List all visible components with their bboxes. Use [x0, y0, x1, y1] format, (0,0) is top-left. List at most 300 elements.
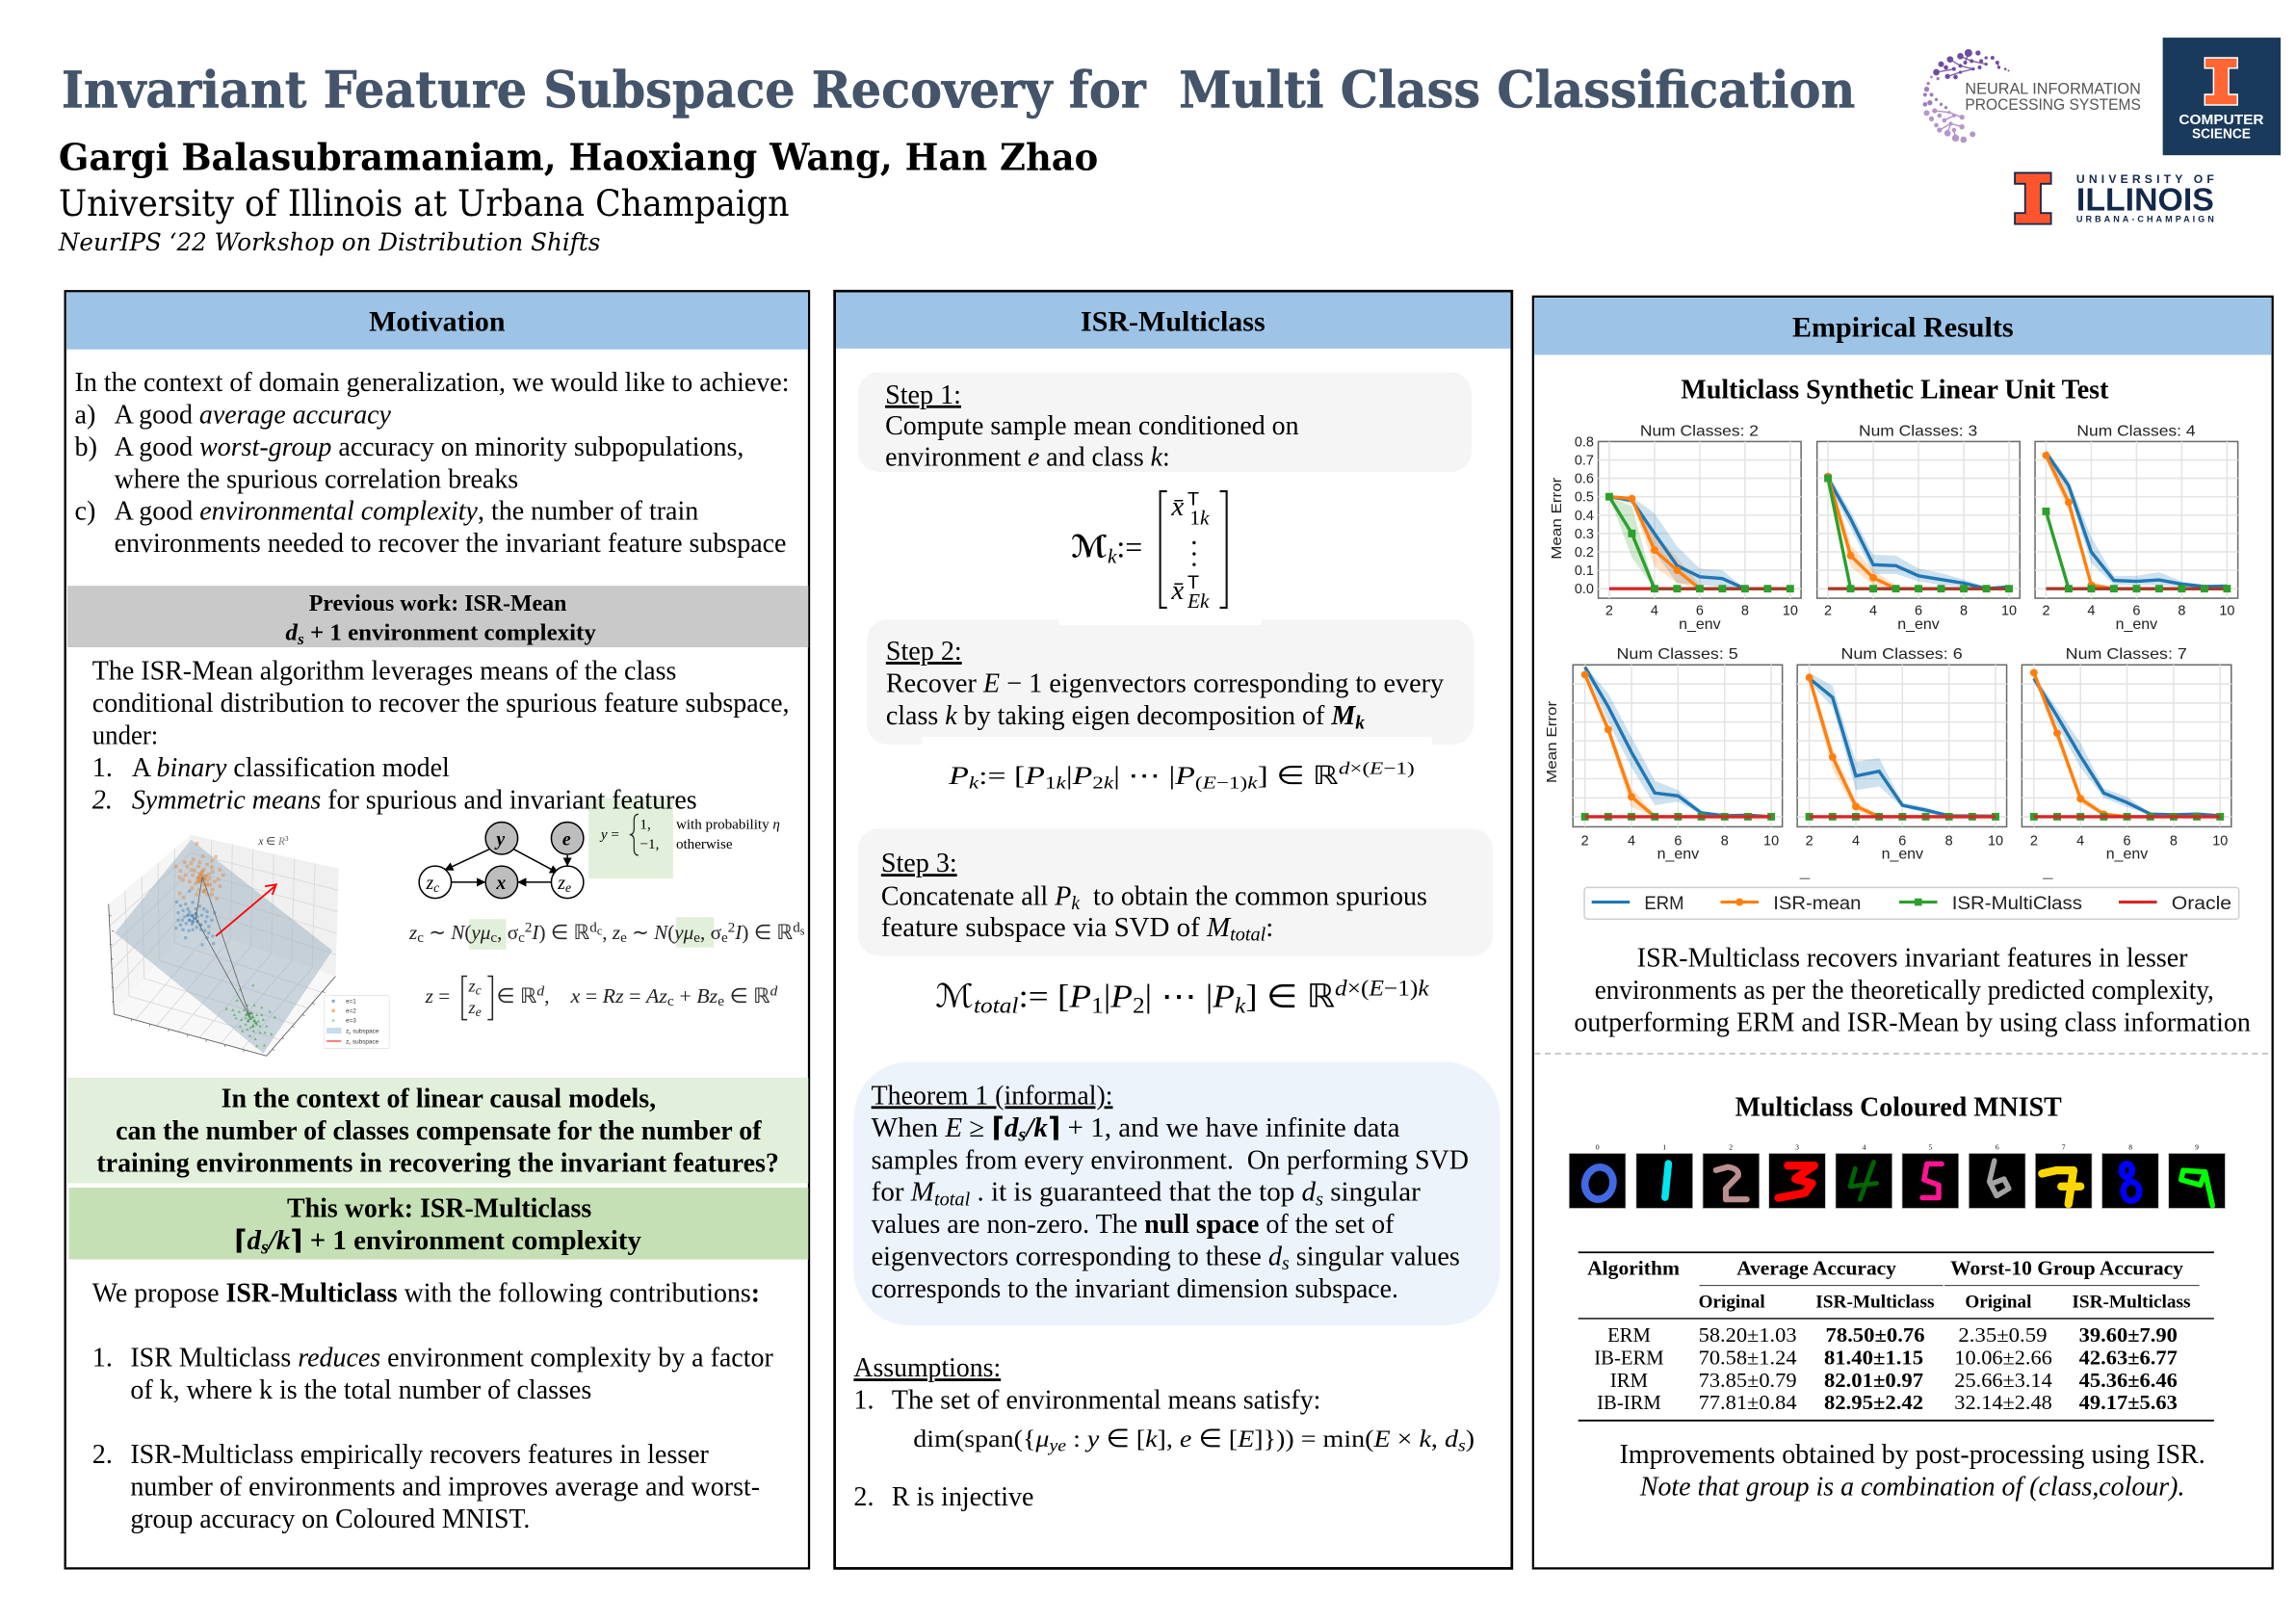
chart: num classes 2: 4	[1651, 604, 1658, 619]
text block: assumptions: dim(span({ μ	[913, 1425, 1048, 1452]
callout: label definition: with probability η	[676, 817, 780, 833]
equation: class mean matrix: k	[1108, 544, 1117, 567]
step 3: k	[1071, 893, 1081, 914]
chart legend: ISR-mean	[1773, 894, 1861, 914]
text block: assumptions: 1.	[853, 1386, 874, 1416]
text block: goals: environments needed to recover the invariant feature subspace	[115, 529, 786, 559]
chart: num classes 2: 0.1	[1575, 563, 1594, 579]
chart: num classes 5: 6	[1674, 833, 1682, 849]
text block: MNIST conclusion	[1620, 1440, 2205, 1502]
text block: ISR-Mean: 1.	[92, 753, 113, 783]
equation: per-class subspace: d×( E −1)	[1339, 759, 1408, 778]
equation: latent to observed: ,	[544, 984, 571, 1007]
text block: MNIST conclusion: Improvements obtained by post-processing using ISR.	[1620, 1440, 2205, 1470]
text block: goals: In the context of domain generalization, we would like to achieve:	[75, 368, 790, 398]
callout: research question: training environments in recovering the invariant features?	[96, 1148, 779, 1178]
panel: ISR-Multiclass	[835, 291, 1512, 1568]
equation: per-class subspace: (E −1) k	[1195, 773, 1255, 793]
text block: contributions: ISR Multiclass reduces environment complexity by a factor	[130, 1344, 773, 1373]
chart: 3D subspace plot: x ∈ R	[258, 836, 285, 848]
equation: latent distributions: N(yμ	[451, 921, 491, 944]
callout: this work: ⌈d	[234, 1226, 261, 1256]
text block: goals: A good average accuracy	[115, 400, 391, 430]
chart: num classes 2: 2	[1605, 604, 1613, 619]
equation: total subspace: |	[1104, 979, 1110, 1014]
table: accuracy results: 45.36±6.46	[2079, 1371, 2178, 1392]
digit samples: 5	[1928, 1143, 1932, 1152]
equation: latent to observed: e	[718, 993, 724, 1009]
step 1	[858, 373, 1472, 472]
equation: total subspace: := [	[1018, 979, 1069, 1014]
step 3: to obtain the common spurious	[1080, 881, 1427, 911]
equation: latent to observed: +	[674, 984, 696, 1007]
text block: contributions: number of environments and improves average and worst-	[130, 1472, 760, 1502]
chart: num classes 2: 0.3	[1575, 527, 1594, 542]
equation: latent to observed	[425, 976, 778, 1020]
heading: motivation: Motivation	[369, 307, 506, 338]
table: accuracy results: 25.66±3.14	[1954, 1371, 2052, 1392]
table: accuracy results: ISR-Multiclass	[1815, 1293, 1934, 1313]
heading: coloured MNIST: Multiclass Coloured MNIST	[1735, 1093, 2062, 1123]
affiliation: University of Illinois at Urbana Champaign	[59, 182, 790, 224]
chart: num classes 3: 10	[2001, 604, 2017, 619]
table: accuracy results: IRM	[1610, 1371, 1648, 1392]
chart: num classes 6: 8	[1945, 833, 1953, 849]
callout: previous work: d	[285, 619, 299, 645]
equation: total subspace: d×(E−1)k	[1335, 976, 1427, 1000]
callout: this work: ⌉ + 1 environment complexity	[290, 1226, 632, 1256]
chart: num classes 5: Num Classes: 5	[1617, 646, 1738, 663]
equation: latent distributions: s	[800, 925, 805, 938]
step 3: Concatenate all P	[881, 881, 1071, 911]
chart: 3D subspace plot: subspace	[351, 1038, 379, 1045]
equation: latent to observed: e	[476, 1005, 482, 1019]
text block: assumptions: The set of environmental means satisfy:	[892, 1386, 1320, 1416]
text block: ISR-Mean: Symmetric means for spurious and invariant features	[132, 785, 697, 815]
chart: num classes 7: 10	[2212, 833, 2228, 849]
table: accuracy results: 78.50±0.76	[1825, 1325, 1925, 1347]
equation: class mean matrix: :=	[1116, 530, 1142, 563]
equation: class mean matrix: ℳ	[1071, 530, 1108, 563]
chart: num classes 4: Num Classes: 4	[2076, 423, 2196, 439]
table: accuracy results: IB-IRM	[1597, 1393, 1661, 1414]
equation: latent to observed: c	[667, 993, 674, 1009]
chart: num classes 2: 0.0	[1575, 582, 1594, 597]
equation: latent distributions: , σ	[700, 921, 722, 944]
chart: num classes 5: Mean Error	[1545, 701, 1560, 783]
digit samples: 3	[1795, 1143, 1799, 1152]
text block: contributions: 1.	[92, 1344, 113, 1373]
theorem: total	[934, 1189, 971, 1210]
text block: assumptions: s	[1458, 1436, 1466, 1455]
chart: num classes 2: 10	[1783, 604, 1798, 619]
table: accuracy results: Algorithm	[1587, 1259, 1680, 1280]
chart: num classes 7: 8	[2170, 833, 2178, 849]
chart: num classes 7: Num Classes: 7	[2066, 646, 2187, 663]
equation: per-class subspace: |	[1066, 761, 1073, 790]
chart: num classes 3: 8	[1960, 604, 1968, 619]
callout: label definition	[588, 798, 780, 878]
heading: synthetic test: Multiclass Synthetic Linear Unit Test	[1681, 376, 2109, 406]
table: accuracy results: 81.40±1.15	[1824, 1347, 1923, 1369]
equation: total subspace: P	[1109, 979, 1133, 1014]
callout: research question: In the context of linear causal models,	[222, 1084, 656, 1113]
equation: latent distributions: e	[721, 929, 728, 946]
logo: NeurIPS: NEURAL INFORMATION	[1965, 79, 2141, 97]
chart: num classes 5: 4	[1628, 833, 1635, 849]
text block: assumptions: :	[1066, 1425, 1087, 1452]
table: accuracy results: 2.35±0.59	[1958, 1325, 2048, 1347]
text block: assumptions: Assumptions:	[853, 1353, 1001, 1383]
equation: latent distributions: N(yμ	[654, 921, 693, 944]
chart: num classes 7: 2	[2030, 833, 2038, 849]
chart: num classes 5: 2	[1581, 833, 1589, 849]
equation: latent distributions: z	[612, 921, 620, 944]
equation: class mean matrix	[1071, 489, 1227, 613]
chart: num classes 7: n_env	[2106, 846, 2148, 862]
chart: 3D subspace plot	[109, 834, 389, 1056]
chart: num classes 5: 8	[1721, 833, 1729, 849]
text block: goals: b)	[75, 432, 97, 462]
heading: empirical results	[1534, 298, 2272, 354]
equation: total subspace: ℳ	[935, 979, 974, 1014]
chart: num classes 7	[2022, 646, 2231, 862]
chart: num classes 2: 0.8	[1575, 434, 1594, 450]
chart: 3D subspace plot: z	[346, 1028, 349, 1034]
theorem: s	[1316, 1189, 1323, 1210]
callout: research question	[67, 1078, 808, 1183]
table: accuracy results: 82.01±0.97	[1824, 1371, 1923, 1392]
text block: goals: c)	[75, 497, 95, 527]
table: accuracy results: 82.95±2.42	[1824, 1393, 1923, 1414]
callout: this work	[68, 1188, 808, 1260]
chart: num classes 6	[1797, 646, 2007, 862]
table: accuracy results: 32.14±2.48	[1954, 1393, 2052, 1414]
digit samples: 0	[1596, 1143, 1600, 1152]
text block: contributions: ISR-Multiclass empirically recovers features in lesser	[130, 1440, 710, 1470]
diagram: causal graph	[419, 823, 584, 899]
equation: per-class subspace: := [	[978, 761, 1025, 790]
logo: NeurIPS	[1923, 49, 2141, 143]
equation: latent to observed: z	[469, 976, 476, 995]
text block: contributions: We propose ISR-Multiclass with the following contributions:	[92, 1279, 760, 1309]
equation: total subspace: 2	[1133, 994, 1145, 1018]
text block: assumptions: ye	[1047, 1436, 1066, 1455]
chart: num classes 6: Num Classes: 6	[1840, 646, 1963, 663]
step 3	[858, 828, 1493, 956]
text block: ISR-Mean: 2.	[92, 785, 113, 815]
theorem: d	[1302, 1178, 1317, 1208]
logo: University of Illinois: ILLINOIS	[2076, 182, 2214, 218]
digit samples: 1	[1662, 1143, 1666, 1152]
equation: per-class subspace: P	[1174, 761, 1195, 790]
step 1: Step 1:	[885, 380, 961, 410]
text block: assumptions: R is injective	[892, 1482, 1033, 1512]
table: accuracy results: 70.58±1.24	[1699, 1347, 1797, 1369]
text block: goals: A good worst-group accuracy on minority subpopulations,	[115, 432, 744, 462]
table: accuracy results: IB-ERM	[1594, 1347, 1664, 1369]
theorem: ⌉ + 1, and we have infinite data	[1048, 1113, 1389, 1143]
venue: NeurIPS ‘22 Workshop on Distribution Shifts	[58, 228, 600, 256]
equation: latent distributions: c	[518, 929, 525, 946]
chart: num classes 7: 6	[2124, 833, 2131, 849]
callout: previous work: + 1 environment complexity	[304, 619, 596, 645]
equation: latent distributions: z	[408, 921, 417, 944]
chart: num classes 2: 0.2	[1575, 545, 1594, 561]
heading: empirical results: Empirical Results	[1792, 313, 2014, 344]
text block: assumptions: 2.	[853, 1482, 874, 1512]
chart legend: ERM	[1644, 894, 1683, 914]
diagram: causal graph: z	[426, 873, 433, 894]
chart: num classes 3: 2	[1824, 604, 1832, 619]
table: accuracy results: 39.60±7.90	[2079, 1325, 2178, 1347]
step 1: Compute sample mean conditioned on	[885, 411, 1299, 441]
callout: research question: can the number of classes compensate for the number of	[116, 1116, 762, 1146]
logo: computer science: SCIENCE	[2192, 125, 2251, 142]
theorem: s	[1282, 1253, 1290, 1274]
text block: assumptions	[853, 1353, 1474, 1512]
text block: ISR-Mean: The ISR-Mean algorithm leverages means of the class	[92, 656, 676, 686]
equation: latent distributions: ∼	[627, 921, 654, 944]
equation: latent distributions: ) ∈ ℝ	[742, 921, 793, 944]
theorem: . it is guaranteed that the top	[970, 1178, 1302, 1208]
theorem: /k	[1024, 1113, 1048, 1143]
callout: previous work: s	[297, 630, 304, 648]
equation: latent distributions: d	[589, 920, 597, 936]
callout: label definition: −1,	[639, 836, 659, 852]
callout: previous work: Previous work: ISR-Mean	[309, 590, 567, 616]
heading: ISR-Multiclass	[836, 293, 1510, 349]
text block: ISR-Mean: under:	[92, 720, 158, 750]
table: accuracy results: 77.81±0.84	[1699, 1393, 1797, 1414]
theorem: samples from every environment. On performing SVD	[872, 1145, 1469, 1175]
chart: num classes 4	[2035, 423, 2238, 633]
digit samples: 6	[1996, 1143, 1999, 1152]
chart: num classes 4: 6	[2132, 604, 2140, 619]
panel: motivation	[65, 291, 809, 1568]
digit samples: 9	[2195, 1143, 2199, 1152]
text block: assumptions: y ∈ [k], e ∈ [E]})) = min( E × k, d	[1087, 1425, 1457, 1452]
equation: per-class subspace: 2k	[1092, 773, 1111, 793]
equation: latent to observed: d	[770, 982, 778, 999]
equation: class mean matrix: 1k	[1189, 506, 1210, 529]
equation: total subspace: P	[1212, 979, 1235, 1014]
table: accuracy results	[1578, 1252, 2214, 1421]
logo: University of Illinois	[2015, 172, 2214, 224]
equation: latent distributions: 2	[728, 920, 735, 936]
chart: num classes 2: 0.5	[1575, 490, 1594, 506]
text block: goals: A good environmental complexity, the number of train	[115, 497, 698, 527]
chart: num classes 6: 4	[1852, 833, 1860, 849]
equation: total subspace: ] ∈ ℝ	[1245, 979, 1335, 1014]
equation: latent distributions: 2	[525, 920, 532, 936]
table: accuracy results: Worst-10 Group Accuracy	[1950, 1259, 2184, 1280]
equation: total subspace: total	[974, 994, 1018, 1018]
theorem: Theorem 1 (informal):	[872, 1081, 1113, 1111]
equation: latent distributions: I	[734, 921, 743, 944]
diagram: causal graph: y	[494, 828, 505, 850]
chart: num classes 2: 8	[1741, 604, 1749, 619]
chart: num classes 2: 6	[1696, 604, 1704, 619]
equation: latent distributions: ) ∈ ℝ	[538, 921, 590, 944]
equation: latent to observed: c	[476, 982, 482, 997]
equation: total subspace: | ⋯ |	[1145, 979, 1213, 1014]
callout: this work: /k	[267, 1226, 290, 1256]
text block: goals: a)	[75, 400, 95, 430]
title: Invariant Feature Subspace Recovery for Multi Class Classification	[62, 62, 1855, 120]
chart: 3D subspace plot: c	[349, 1040, 351, 1045]
table: accuracy results: 58.20±1.03	[1699, 1325, 1797, 1347]
table: accuracy results: ISR-Multiclass	[2072, 1293, 2191, 1313]
table: accuracy results: Original	[1699, 1293, 1765, 1313]
diagram: causal graph: e	[565, 880, 571, 895]
equation: per-class subspace: P	[1024, 761, 1045, 790]
chart: num classes 4: 2	[2042, 604, 2049, 619]
theorem: s	[1017, 1124, 1027, 1145]
diagram: causal graph: e	[562, 828, 571, 850]
table: accuracy results: 10.06±2.66	[1954, 1347, 2052, 1369]
equation: per-class subspace: | ⋯ |	[1113, 761, 1175, 790]
step 2: class k by taking eigen decomposition of M	[886, 701, 1355, 731]
callout: label definition: 1,	[639, 817, 651, 833]
equation: class mean matrix: T	[1187, 572, 1199, 593]
equation: latent distributions: ∼	[424, 921, 451, 944]
chart: num classes 2: Mean Error	[1550, 477, 1565, 560]
equation: total subspace: k	[1235, 994, 1246, 1018]
equation: class mean matrix: Ek	[1187, 589, 1210, 613]
chart: num classes 2: 0.4	[1575, 509, 1594, 524]
theorem: corresponds to the invariant dimension subspace.	[872, 1274, 1398, 1304]
text block: ISR-Mean	[92, 656, 790, 815]
equation: latent distributions: c	[417, 929, 424, 946]
step 1: environment e and class k:	[885, 442, 1170, 472]
equation: latent to observed: x = Rz = Az	[571, 984, 666, 1007]
logo: computer science: COMPUTER	[2179, 112, 2264, 128]
text block: goals	[75, 368, 790, 559]
equation: total subspace: P	[1068, 979, 1091, 1014]
chart: num classes 2	[1550, 423, 1801, 633]
equation: per-class subspace: k	[969, 773, 979, 793]
logo: University of Illinois: UNIVERSITY OF	[2076, 172, 2214, 186]
equation: latent to observed: z	[469, 998, 476, 1017]
logo: University of Illinois: URBANA-CHAMPAIGN	[2076, 215, 2214, 224]
chart: 3D subspace plot: e=3	[346, 1018, 356, 1025]
chart legend: ISR-MultiClass	[1952, 894, 2082, 914]
equation: class mean matrix: x̄	[1170, 575, 1184, 606]
equation: latent distributions: , σ	[497, 921, 519, 944]
equation: latent distributions: ,	[602, 921, 613, 944]
step 2	[867, 619, 1474, 745]
equation: latent distributions: I	[531, 921, 539, 944]
equation: latent to observed: Bz	[696, 984, 718, 1007]
step 3: Step 3:	[881, 849, 957, 878]
text block: synthetic conclusion: outperforming ERM and ISR-Mean by using class information	[1574, 1007, 2251, 1037]
table: accuracy results: Original	[1965, 1293, 2031, 1313]
equation: latent to observed: d	[536, 982, 545, 999]
table: accuracy results: 49.17±5.63	[2079, 1393, 2178, 1414]
step 2: Recover E − 1 eigenvectors corresponding to every	[886, 668, 1444, 698]
text block: assumptions: )	[1466, 1425, 1474, 1452]
chart: num classes 3	[1817, 423, 2020, 633]
equation: latent to observed: ∈ ℝ	[496, 984, 535, 1007]
table: accuracy results: 42.63±6.77	[2079, 1347, 2178, 1369]
heading: motivation	[66, 292, 808, 350]
diagram: causal graph: z	[558, 873, 565, 894]
logo: NeurIPS: PROCESSING SYSTEMS	[1965, 95, 2141, 114]
chart: num classes 3: n_env	[1897, 616, 1940, 633]
heading: ISR-Multiclass: ISR-Multiclass	[1081, 307, 1265, 338]
digit samples	[1569, 1143, 2225, 1208]
text block: contributions: group accuracy on Coloured MNIST.	[130, 1504, 530, 1534]
callout: label definition: y =	[599, 826, 619, 843]
chart: num classes 3: 4	[1869, 604, 1877, 619]
chart: 3D subspace plot: e=1	[346, 999, 356, 1006]
text block: ISR-Mean: conditional distribution to recover the spurious feature subspace,	[92, 689, 790, 719]
callout: this work: s	[260, 1237, 269, 1258]
chart: num classes 3: 6	[1915, 604, 1922, 619]
theorem: singular	[1323, 1178, 1421, 1208]
equation: latent distributions: d	[793, 920, 800, 936]
theorem: When E ≥ ⌈d	[872, 1113, 1018, 1143]
chart: num classes 4: n_env	[2116, 616, 2157, 633]
equation: latent distributions	[408, 917, 805, 950]
callout: previous work	[67, 586, 808, 648]
equation: total subspace: 1	[1091, 994, 1104, 1018]
chart: num classes 5: n_env	[1657, 846, 1699, 862]
text block: synthetic conclusion: ISR-Multiclass recovers invariant features in lesser	[1637, 943, 2188, 973]
theorem	[853, 1061, 1500, 1325]
chart: num classes 4: 10	[2219, 604, 2234, 619]
theorem: singular values	[1290, 1243, 1460, 1272]
chart: num classes 3: Num Classes: 3	[1859, 423, 1977, 439]
theorem: values are non-zero. The null space of the set of	[872, 1210, 1395, 1240]
table: accuracy results: ERM	[1607, 1325, 1651, 1347]
text block: contributions: 2.	[92, 1440, 113, 1470]
digit samples: 2	[1729, 1143, 1733, 1152]
equation: class mean matrix: x̄	[1170, 491, 1184, 522]
chart legend: Oracle	[2172, 894, 2231, 914]
chart: 3D subspace plot: 3	[285, 834, 289, 843]
step 3: feature subspace via SVD of M	[881, 913, 1229, 943]
theorem: eigenvectors corresponding to these d	[872, 1243, 1282, 1272]
table: accuracy results: Average Accuracy	[1736, 1259, 1897, 1280]
text block: synthetic conclusion	[1574, 943, 2251, 1037]
callout: this work: This work: ISR-Multiclass	[287, 1193, 591, 1223]
step 3: total	[1230, 925, 1266, 946]
equation: latent distributions: e	[693, 929, 700, 946]
digit samples: 7	[2062, 1143, 2066, 1152]
chart: num classes 6: 2	[1806, 833, 1813, 849]
diagram: causal graph: x	[495, 873, 506, 894]
equation: latent to observed: ∈ ℝ	[724, 984, 770, 1007]
chart legend	[1584, 887, 2239, 919]
chart: num classes 2: n_env	[1679, 616, 1721, 633]
chart: num classes 2: Num Classes: 2	[1640, 423, 1759, 439]
chart: num classes 5	[1545, 646, 1783, 862]
equation: per-class subspace: P	[948, 761, 969, 790]
table: accuracy results: 73.85±0.79	[1699, 1371, 1797, 1392]
chart: num classes 6: n_env	[1882, 846, 1923, 862]
chart: 3D subspace plot: e	[349, 1030, 352, 1034]
chart: num classes 4: 4	[2087, 604, 2095, 619]
text block: synthetic conclusion: environments as per the theoretically predicted complexity,	[1595, 976, 2214, 1006]
callout: label definition: otherwise	[676, 836, 733, 852]
equation: per-class subspace: P	[1071, 761, 1092, 790]
text block: ISR-Mean: A binary classification model	[132, 753, 450, 783]
equation: per-class subspace: 1k	[1045, 773, 1064, 793]
equation: latent distributions: c	[597, 925, 603, 938]
text block: contributions	[92, 1279, 773, 1534]
